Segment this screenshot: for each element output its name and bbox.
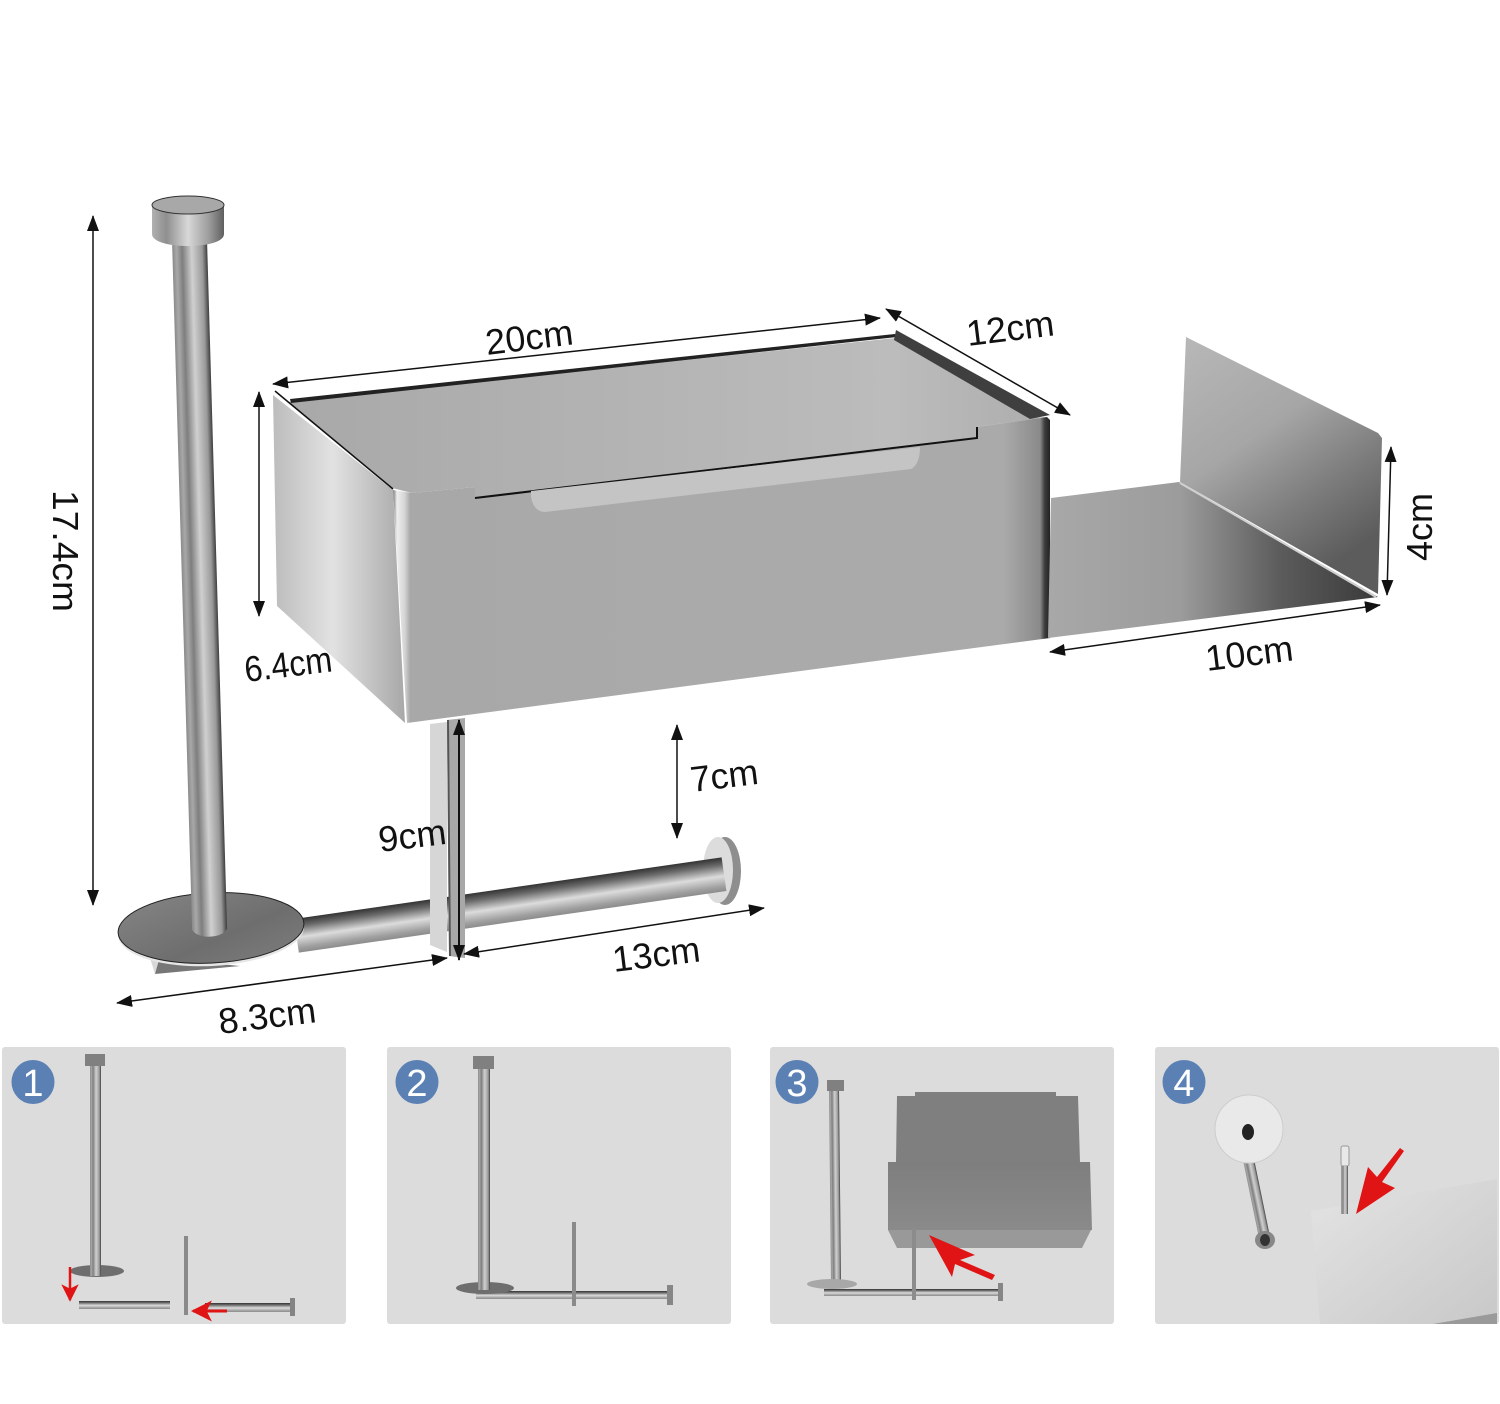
- dimension: 17.4cm height: 17.4cm: [45, 490, 86, 612]
- step 1 pole: [70, 1054, 124, 1277]
- product: roll bar with end cap: [294, 837, 741, 953]
- shelf back wall: [1180, 337, 1382, 594]
- lid rear rim: [290, 334, 897, 403]
- shelf fold line: [1180, 483, 1376, 597]
- step 3 holder: [807, 1080, 1003, 1301]
- lid left edge: [275, 391, 393, 489]
- finger recess: [531, 447, 920, 512]
- pole shaft: [172, 239, 227, 937]
- dimension: 4cm height: 4cm: [1399, 493, 1440, 561]
- step 1 red arrows: [70, 1267, 227, 1311]
- box lid: [275, 338, 1047, 498]
- dimension: 10cm length: [1050, 605, 1380, 679]
- dimension: 10cm length: 10cm: [1203, 628, 1295, 679]
- box front face: [393, 417, 1050, 723]
- panel: step 1: [2, 1047, 346, 1324]
- step 2 badge: 2: [406, 1063, 428, 1105]
- step 4 peg: [1341, 1146, 1349, 1214]
- step 2 assembled holder: [456, 1056, 673, 1306]
- dimension: 7cm gap: [677, 725, 760, 838]
- panel: step 2: [387, 1047, 731, 1324]
- dimension: 8.3cm rod: 8.3cm: [216, 989, 318, 1042]
- dimension: 6.4cm height: 6.4cm: [242, 639, 334, 690]
- product: upright paper towel pole with base disc: [116, 196, 306, 974]
- step 4 disc and pole: [1215, 1095, 1283, 1249]
- wall corner: [1311, 1179, 1497, 1324]
- pole top cap: [152, 196, 224, 246]
- dimension: 8.3cm rod: [117, 958, 447, 1042]
- dimension: 20cm width: [273, 312, 880, 384]
- step 4 badge: 4: [1173, 1063, 1195, 1105]
- step 3 box: [888, 1092, 1092, 1300]
- panel: step 3: [770, 1047, 1114, 1324]
- dimension: 7cm gap: 7cm: [688, 751, 760, 800]
- box left side: [273, 395, 405, 723]
- step 2 badge: [396, 1060, 438, 1105]
- product: side shelf: [1048, 337, 1382, 638]
- step 1 badge: 1: [22, 1063, 44, 1105]
- step 3 badge: 3: [786, 1063, 808, 1105]
- dimension: 20cm width: 20cm: [483, 312, 575, 363]
- lid slot line: [475, 427, 977, 498]
- panel: step 4: [1155, 1047, 1499, 1324]
- dimension: 13cm rod: 13cm: [610, 929, 702, 980]
- dimension: 13cm rod: [464, 908, 764, 980]
- product: vertical bracket plate: [430, 718, 465, 958]
- step 3 badge: [776, 1060, 818, 1105]
- dimension: 4cm height: [1387, 447, 1440, 595]
- rod end cap: [703, 837, 741, 905]
- dimension: 12cm depth: [886, 303, 1070, 415]
- lid right rim: [894, 330, 1050, 419]
- dimension: 9cm bracket: 9cm: [376, 811, 448, 860]
- step 4 badge: [1162, 1060, 1206, 1105]
- step 1 badge: [12, 1060, 54, 1105]
- product: wipes box: [273, 330, 1050, 723]
- step 3 red arrow: [929, 1235, 995, 1280]
- shelf floor: [1048, 482, 1378, 638]
- rod: [294, 857, 726, 953]
- step 1 rods: [79, 1236, 295, 1316]
- dimension: 12cm depth: 12cm: [964, 303, 1056, 354]
- base disc: [116, 888, 306, 971]
- step 4 red arrow: [1356, 1148, 1404, 1214]
- rear base bracket: [150, 958, 240, 974]
